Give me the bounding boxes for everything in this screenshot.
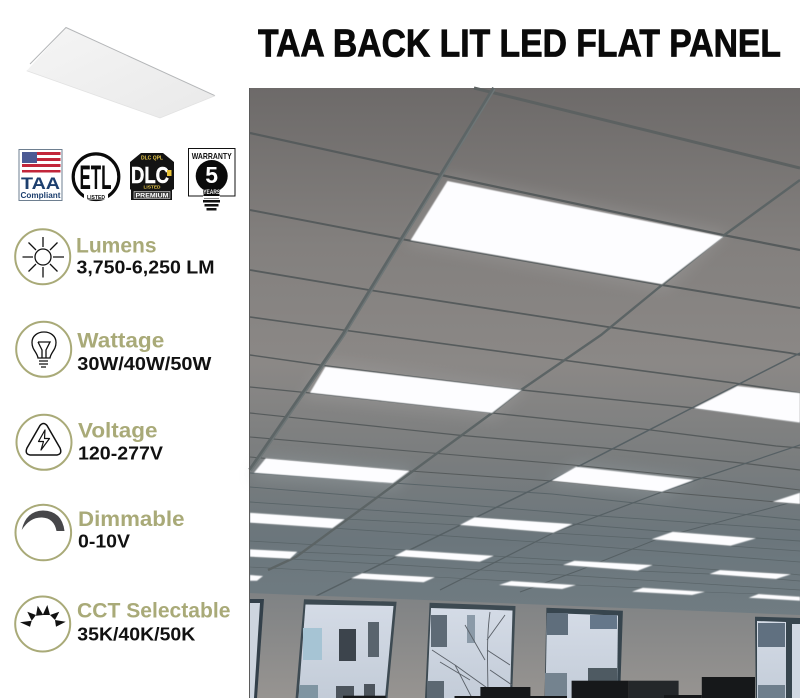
photo: office ceiling with LED panels [249,88,800,698]
back wall [249,593,800,698]
badge: 5 year warranty: 5 [205,162,218,188]
badge: DLC Premium: DLC [131,162,169,188]
icon: sun [15,229,70,284]
spec: Wattage [16,322,212,377]
windows [249,599,800,698]
spec: CCT Selectable: 35K/40K/50K [77,624,196,645]
ceiling grid: cross tees [250,88,800,597]
badge: 5 year warranty [188,148,235,210]
badge: DLC Premium: LISTED [144,184,161,190]
spec: Lumens: 3,750-6,250 LM [76,256,214,277]
spec: Lumens [15,229,215,284]
badge: TAA Compliant: TAA [21,175,60,193]
spec: Voltage [16,415,164,470]
spec: Voltage: 120-277V [78,442,164,464]
badge: DLC Premium: PREMIUM [136,192,168,200]
badge: 5 year warranty: YEARS [203,190,220,196]
photo left edge [249,88,250,698]
spec: CCT Selectable [15,596,231,652]
LED panels lit [250,181,800,601]
icon: color temperature spikes [15,596,70,652]
ceiling background [249,88,800,618]
desktop monitors [343,677,755,698]
badge: DLC Premium [130,153,174,200]
spec: Voltage: Voltage [78,419,158,442]
badge: ETL Listed: ETL [80,159,112,197]
product image: LED flat panel [27,28,215,118]
spec: Wattage: Wattage [77,330,164,353]
badge: ETL Listed [73,154,119,201]
spec: Lumens: Lumens [76,234,156,257]
icon: American flag [22,152,60,172]
icon: dimmer arc [16,505,71,560]
icon: high voltage triangle [16,415,72,470]
badge: TAA Compliant [19,150,62,200]
spec: Dimmable [16,505,184,560]
ceiling grid: main beams [250,88,800,604]
spec: Dimmable: Dimmable [78,508,184,531]
spec: CCT Selectable: CCT Selectable [77,600,230,623]
badge: 5 year warranty: WARRANTY [192,151,232,161]
spec: Dimmable: 0-10V [78,531,131,552]
badge: ETL Listed: LISTED [87,195,105,201]
icon: light bulb [16,322,71,377]
badge: TAA Compliant: Compliant [20,190,61,200]
bare tree [432,612,512,698]
ceiling glow around panels [250,175,730,497]
spec: Wattage: 30W/40W/50W [77,353,212,374]
badge: DLC Premium: DLC QPL [141,156,164,162]
